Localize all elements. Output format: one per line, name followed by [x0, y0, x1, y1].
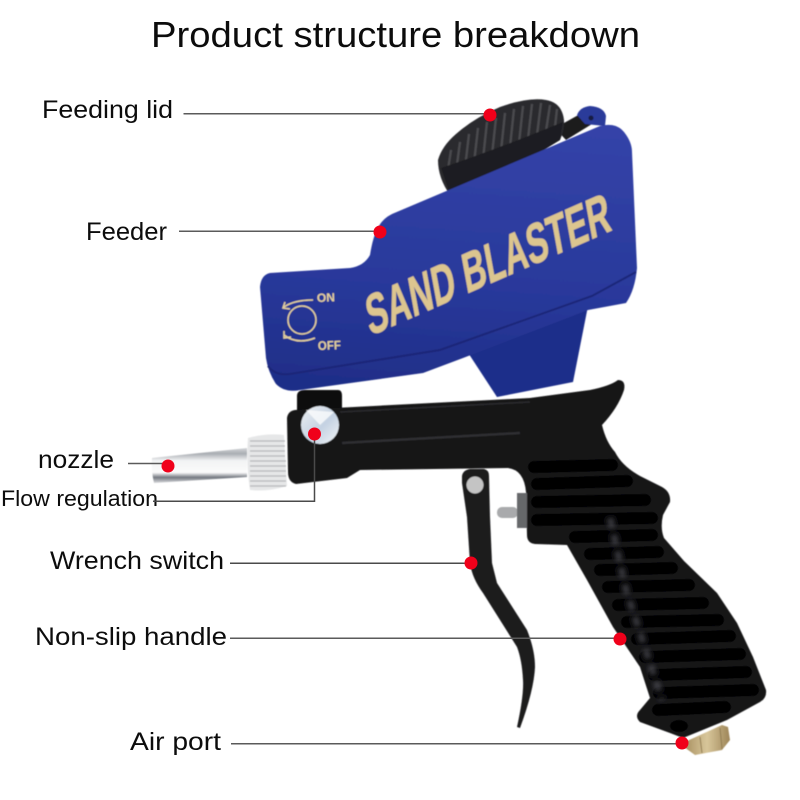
barrel highlight	[342, 433, 520, 443]
gun barrel and grip	[287, 380, 766, 738]
callout: Feeding lid	[42, 96, 496, 124]
icon: lid hinge	[555, 106, 606, 140]
callout: Wrench switch	[50, 547, 478, 575]
product: sand blaster gun	[152, 99, 766, 755]
icon: on/off dial	[283, 300, 316, 341]
callout: Feeder	[86, 218, 386, 246]
label: SAND BLASTER: SAND BLASTER	[361, 180, 615, 348]
callout: nozzle	[38, 446, 174, 474]
feeding lid cap	[438, 99, 564, 195]
nozzle knurled collar	[247, 434, 287, 490]
air port brass fitting	[684, 725, 730, 755]
trigger pivot bolt	[466, 476, 484, 494]
callout: nozzle: nozzle	[38, 446, 114, 474]
nozzle cone	[152, 448, 247, 483]
callout: Non-slip handle: Non-slip handle	[35, 623, 227, 651]
text: ON: ON	[317, 290, 335, 305]
text: OFF: OFF	[318, 338, 341, 353]
feeder lower seam	[268, 272, 636, 374]
adjustment knob	[301, 406, 339, 444]
callout: Air port: Air port	[130, 728, 221, 756]
air pin	[497, 493, 527, 528]
air port hole	[670, 720, 688, 732]
grip highlight	[610, 518, 662, 700]
callout: Feeder: Feeder	[86, 218, 167, 246]
valve stem	[297, 390, 342, 414]
title: Product structure breakdown	[151, 14, 640, 55]
callout: Feeding lid: Feeding lid	[42, 96, 173, 124]
callout: Non-slip handle	[35, 623, 626, 651]
callout: Wrench switch: Wrench switch	[50, 547, 224, 575]
callout: Flow regulation: Flow regulation	[1, 486, 158, 511]
callout: Flow regulation	[1, 428, 321, 511]
hopper lower wedge	[463, 306, 588, 397]
barrel top edge	[340, 402, 530, 412]
trigger lever	[462, 469, 535, 728]
callout: Air port	[130, 728, 688, 756]
grip slots	[534, 465, 753, 710]
feeder body	[260, 125, 637, 391]
